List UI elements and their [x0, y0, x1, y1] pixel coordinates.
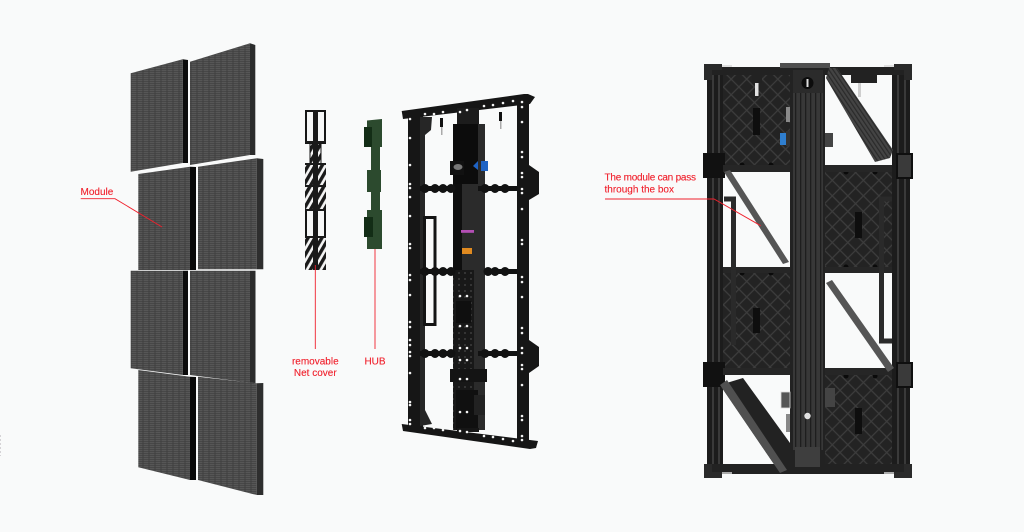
callout: HUB — [364, 249, 386, 368]
rear panels — [723, 75, 892, 465]
callout: removable Net cover — [292, 265, 339, 379]
small connectors — [780, 107, 835, 432]
callout: HUB: HUB — [364, 356, 386, 368]
callout: The module can pass through the box — [604, 172, 761, 226]
outer rails — [707, 63, 910, 474]
module row 4 right — [198, 377, 263, 495]
left edge marks — [0, 435, 1, 456]
centre column — [450, 108, 487, 432]
module row 2 left — [138, 167, 196, 270]
cross bars — [723, 165, 892, 375]
module row 1 right — [190, 43, 255, 165]
HUB circuit board — [364, 119, 382, 249]
angled module bottom left — [720, 378, 790, 473]
callout: removable Net cover: Net cover — [294, 368, 337, 379]
exploded LED modules — [131, 43, 263, 495]
removable net cover part — [305, 110, 326, 270]
module row 3 right — [190, 271, 256, 383]
callout: removable Net cover: removable — [292, 356, 339, 368]
clamps and bolts — [752, 71, 877, 97]
clamps and bolts — [440, 112, 502, 135]
callout: Module — [80, 187, 162, 227]
side handles — [724, 199, 892, 345]
centre extrusion — [790, 68, 825, 473]
angled module lower right — [826, 280, 894, 372]
module row 4 left — [138, 370, 196, 480]
angled module upper left — [724, 170, 789, 264]
corner brackets — [704, 64, 912, 478]
side clamps — [703, 153, 912, 387]
module row 2 right — [198, 158, 263, 269]
callout: Module: Module — [80, 187, 114, 198]
cabinet frame, rear exploded view — [402, 94, 539, 449]
mounting holes — [410, 101, 522, 441]
callout: The module can pass through the box: The module can pass — [604, 172, 696, 184]
callout: The module can pass through the box: through the box — [604, 184, 674, 196]
angled module top right — [826, 68, 893, 162]
module row 1 left — [131, 59, 188, 172]
cabinet with module passing through — [703, 63, 912, 478]
blue, purple and orange connectors — [454, 161, 488, 254]
cross bars with knobs — [420, 186, 517, 356]
module row 3 left — [131, 271, 188, 375]
frame rails — [402, 94, 539, 449]
